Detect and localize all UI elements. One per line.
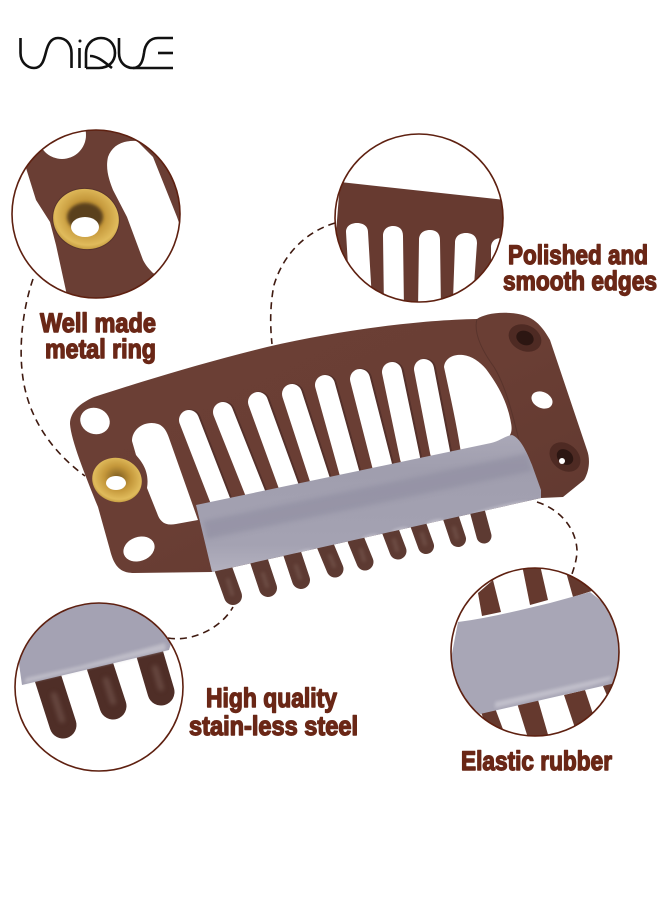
right window opening — [444, 355, 512, 460]
brown rivet bottom — [544, 436, 586, 478]
callout circle: metal ring close-up — [11, 129, 181, 299]
brown rivet top — [504, 319, 546, 357]
dashed connector: steel teeth callout — [168, 607, 233, 639]
clip teeth below rubber — [223, 510, 484, 596]
label: high quality stainless steel: High quality — [206, 683, 337, 713]
callout circle: rubber close-up — [445, 565, 625, 738]
main product: hair clip — [70, 313, 589, 596]
clip body — [70, 313, 589, 573]
dashed connector: polished edges callout — [271, 223, 335, 344]
callout circle: polished edges close-up — [334, 133, 504, 303]
label: well made metal ring: Well made — [40, 308, 156, 338]
gold metal ring — [87, 452, 147, 508]
label: elastic rubber: Elastic rubber — [461, 746, 612, 776]
left window opening — [132, 423, 198, 525]
clip tab overlap edge — [476, 319, 522, 453]
label: metal ring line two: metal ring — [45, 334, 156, 364]
dashed connector: rubber callout — [537, 502, 577, 574]
callout circle: steel teeth close-up — [10, 600, 185, 771]
comb slots: white openings — [189, 369, 442, 505]
mounting holes — [76, 388, 555, 566]
logo: UNIQLE wordmark — [20, 38, 173, 68]
dashed connector: metal ring callout — [21, 279, 85, 476]
label: stainless steel line two: stain-less steel — [189, 711, 358, 741]
silicone rubber strip — [196, 435, 541, 572]
